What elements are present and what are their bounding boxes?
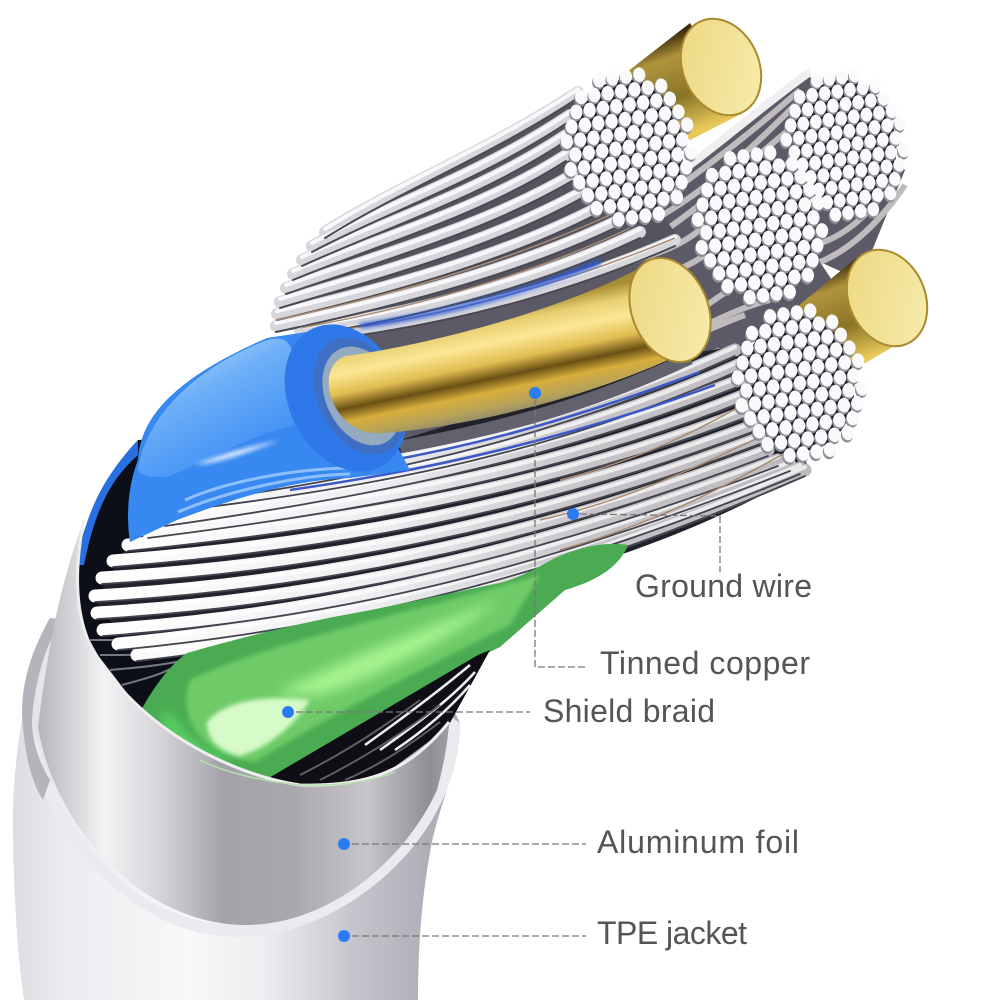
label: Ground wire: Ground wire (635, 568, 812, 604)
back silver bundle (340, 72, 905, 440)
gold wire right (793, 237, 942, 370)
leader lines (296, 400, 720, 936)
foil inner cavity (76, 430, 490, 787)
label: TPE jacket: TPE jacket (597, 915, 747, 951)
callout dot: shield braid (282, 706, 294, 718)
shield braid strands (262, 650, 490, 787)
top silver bundle (276, 89, 680, 338)
dark strands in cavity (90, 640, 205, 685)
label: Aluminum foil: Aluminum foil (597, 824, 799, 860)
gold wire center: tinned copper (329, 246, 725, 433)
bundle cross-section 4 (729, 305, 870, 463)
bundle cross-section 3 (689, 147, 830, 305)
label: Shield braid: Shield braid (543, 693, 715, 729)
gold wire top (627, 6, 776, 140)
callout dot: aluminum foil (338, 838, 350, 850)
foil inner blue sliver (78, 440, 138, 565)
aluminum foil (38, 520, 449, 925)
callout dot: tinned copper (529, 387, 541, 399)
label: Tinned copper: Tinned copper (600, 645, 810, 681)
bundle cross-section 1 (558, 69, 699, 227)
green wire (140, 544, 628, 780)
jacket rim (22, 618, 460, 937)
blue insulated wire (128, 304, 431, 542)
bundle cross-section 2 (778, 70, 912, 222)
callout dot: TPE jacket (338, 930, 350, 942)
main silver bundle: ground wire (95, 345, 810, 662)
callout dot: ground wire (567, 508, 579, 520)
TPE jacket (13, 600, 460, 1000)
